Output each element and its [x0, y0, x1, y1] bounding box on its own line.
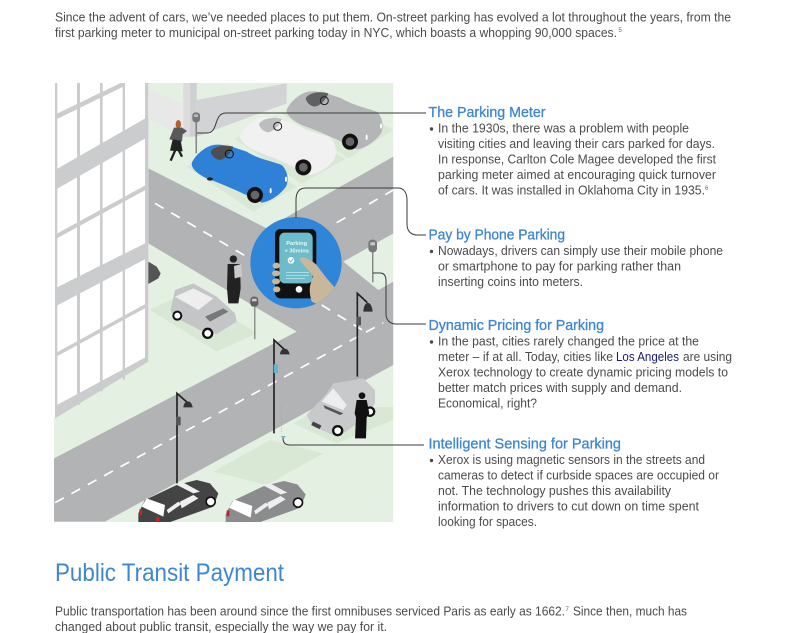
section: Intelligent Sensing for Parking: looking for spaces.: [438, 515, 537, 529]
closing paragraph: 7: [566, 607, 570, 613]
section: Dynamic Pricing for Parking: meter – if at all. Today, cities like: [438, 350, 613, 364]
section: The Parking Meter: of cars. It was installed in Oklahoma City in 1935.: [438, 184, 705, 198]
section: Pay by Phone Parking: Pay by Phone Parking: [428, 228, 565, 244]
car: white convertible: [240, 117, 336, 175]
intro paragraph: [55, 10, 731, 40]
section: Dynamic Pricing for Parking: In the past, cities rarely changed the price at the: [438, 334, 699, 348]
street lamps: [176, 293, 373, 483]
section: Intelligent Sensing for Parking: cameras to detect if curbside spaces are occupied or: [438, 468, 719, 482]
section: The Parking Meter: In response, Carlton Cole Magee developed the first: [438, 152, 716, 166]
parking bays: [150, 90, 393, 485]
heading: Public Transit Payment: Public Transit Payment: [55, 559, 284, 587]
section: Pay by Phone Parking: inserting coins into meters.: [438, 275, 583, 289]
section: Pay by Phone Parking: Nowadays, drivers can simply use their mobile phone: [438, 244, 723, 258]
section: Dynamic Pricing for Parking: Economical, right?: [438, 396, 537, 410]
section: Dynamic Pricing for Parking: Los Angeles: [616, 350, 679, 364]
intro paragraph: Since the advent of cars, we’ve needed places to put them. On-street parking has evolved a lot throughout the years, from the: [55, 10, 731, 24]
section: Intelligent Sensing for Parking: Xerox is using magnetic sensors in the streets and: [438, 453, 705, 467]
phone screen text: + 30mins: [284, 248, 309, 254]
section: Dynamic Pricing for Parking: Dynamic Pricing for Parking: [428, 318, 604, 334]
section: Intelligent Sensing for Parking: Intelligent Sensing for Parking: [428, 436, 621, 452]
grey car at bottom: [226, 481, 306, 524]
section: Dynamic Pricing for Parking: [428, 318, 732, 410]
intro paragraph: first parking meter to municipal on-street parking today in NYC, which boasts a whopping 90,000 spaces.: [55, 26, 617, 40]
section: Dynamic Pricing for Parking: are using: [683, 350, 732, 364]
section: Intelligent Sensing for Parking: information to drivers to cut down on time spent: [438, 500, 699, 514]
parking meter: [192, 112, 200, 153]
road network: [54, 157, 393, 522]
phone app circle: [250, 217, 342, 310]
car: grey convertible: [287, 91, 383, 150]
parked grey car, left block: [148, 262, 237, 339]
parking meter, corner: [368, 240, 377, 282]
section: The Parking Meter: 6: [705, 186, 709, 192]
closing paragraph: [55, 604, 687, 633]
section: Pay by Phone Parking: [428, 228, 723, 289]
curbside sensor: [281, 407, 286, 439]
intro paragraph: 5: [618, 28, 622, 34]
section: The Parking Meter: [428, 105, 716, 198]
man reading: [227, 255, 242, 303]
section: The Parking Meter: The Parking Meter: [428, 105, 546, 121]
car: blue convertible: [192, 145, 288, 203]
background building and pillar: [183, 83, 287, 137]
leader lines: [197, 113, 426, 445]
section: The Parking Meter: In the 1930s, there was a problem with people: [438, 122, 689, 136]
office building facade: [54, 82, 148, 418]
section: Dynamic Pricing for Parking: Xerox technology to create dynamic pricing models to: [438, 366, 728, 380]
closing paragraph: Since then, much has: [573, 604, 687, 618]
section: Dynamic Pricing for Parking: better match prices with supply and demand.: [438, 381, 682, 395]
section: Intelligent Sensing for Parking: not. The technology pushes this availability: [438, 484, 672, 498]
section: Intelligent Sensing for Parking: [428, 436, 719, 529]
section: The Parking Meter: parking meter aimed at encouraging quick turnover: [438, 168, 716, 182]
woman walking: [169, 120, 187, 161]
phone screen text: [284, 241, 309, 252]
section: Pay by Phone Parking: or smartphone to pay for parking rather than: [438, 260, 681, 274]
parking meter, road side: [250, 297, 258, 339]
illustration: isometric street with parking: [54, 82, 393, 524]
car and man on right: [307, 378, 375, 438]
dark car at bottom: [138, 480, 218, 523]
closing paragraph: Public transportation has been around since the first omnibuses serviced Paris as early as 1662.: [55, 604, 565, 618]
phone screen text: Parking: [286, 241, 308, 247]
section: The Parking Meter: visiting cities and leaving their cars parked for days.: [438, 137, 715, 151]
